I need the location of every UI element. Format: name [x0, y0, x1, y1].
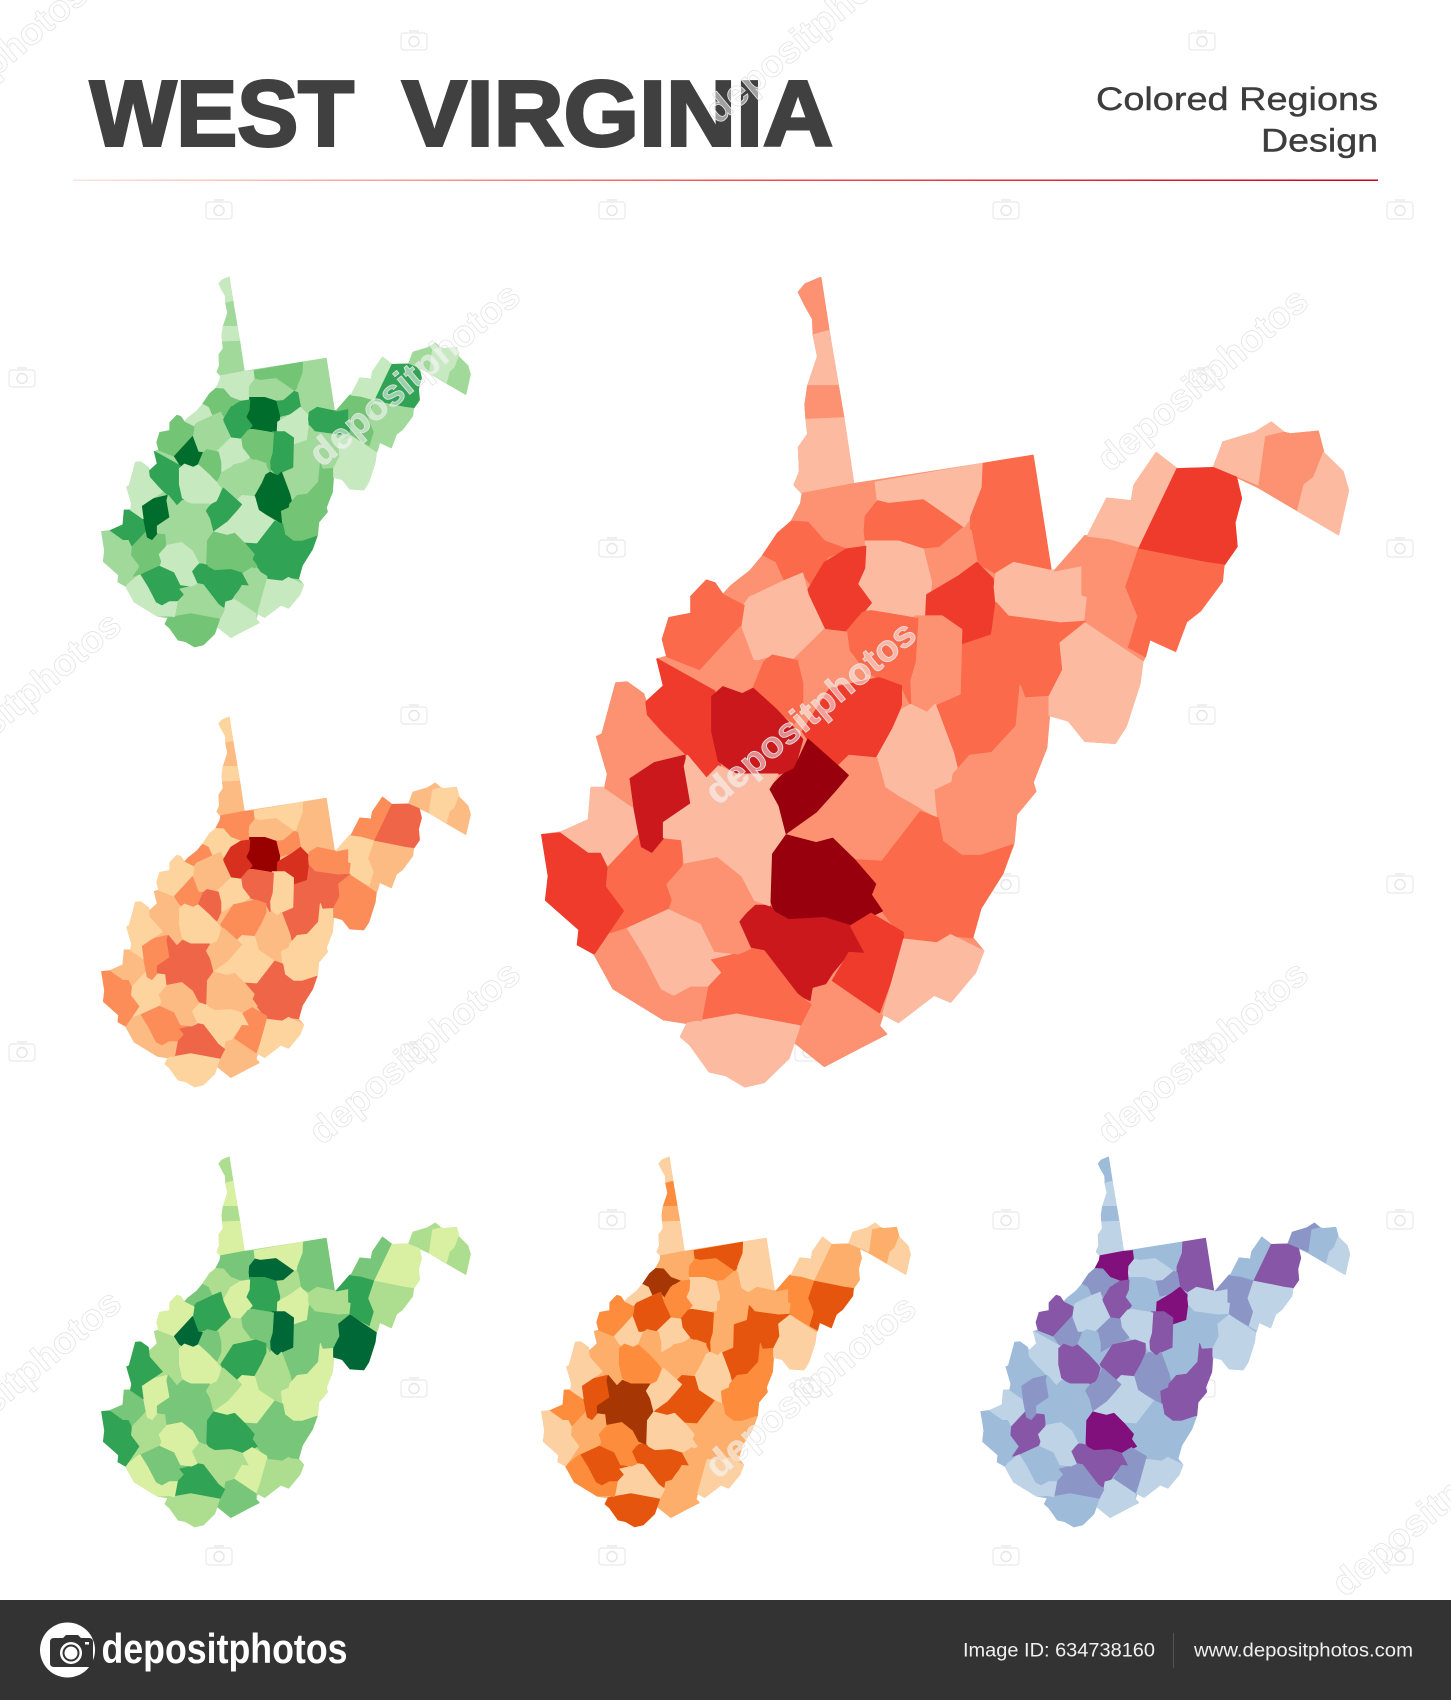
large map: reds — [542, 278, 1348, 1087]
diagonal stock watermarks: depositphotos — [301, 274, 528, 474]
small map: oranges — [542, 1157, 910, 1527]
diagonal stock watermarks: depositphotos — [697, 1286, 924, 1486]
small map: blue-purple — [981, 1157, 1350, 1527]
footer bar — [0, 1600, 1451, 1700]
image id: Image ID: 634738160 — [963, 1640, 1155, 1662]
website url: www.depositphotos.com — [1193, 1640, 1413, 1662]
diagonal stock watermarks: depositphotos — [697, 612, 924, 812]
subtitle: Design — [1261, 122, 1378, 158]
title — [90, 62, 833, 166]
subtitle — [1096, 81, 1378, 158]
subtitle: Colored Regions — [1096, 81, 1378, 117]
small map: greens — [102, 277, 470, 647]
diagonal stock watermarks: depositphotos — [1089, 952, 1316, 1152]
footer logo — [40, 1622, 348, 1678]
footer logo: depositphotos — [102, 1625, 348, 1672]
small map: orange-red — [102, 717, 470, 1087]
footer divider — [1173, 1633, 1174, 1668]
header divider line — [73, 180, 1378, 181]
diagonal stock watermarks: depositphotos — [301, 952, 528, 1152]
small map: yellow-green — [102, 1157, 470, 1527]
title: WEST — [90, 62, 354, 166]
title: VIRGINIA — [402, 62, 833, 166]
icon: camera badge — [40, 1622, 95, 1678]
diagonal stock watermarks: depositphotos — [1089, 279, 1316, 479]
